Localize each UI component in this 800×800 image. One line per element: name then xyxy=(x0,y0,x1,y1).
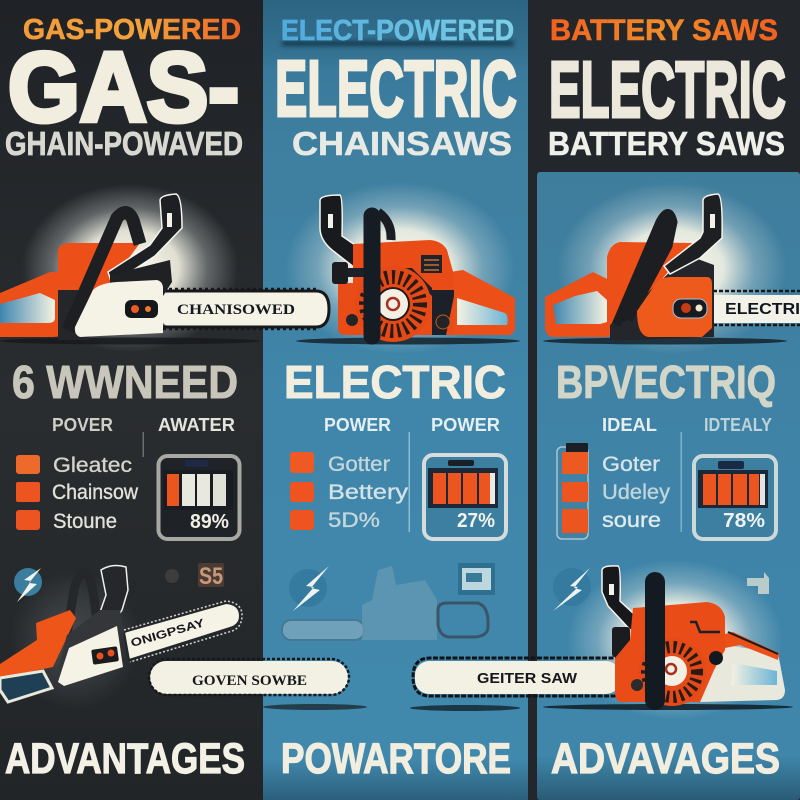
panel: battery column blue background xyxy=(537,172,800,800)
panel: gas-powered column background xyxy=(0,0,264,800)
indicator light right xyxy=(145,306,151,312)
heading block: gas column xyxy=(5,14,243,162)
cell 2 xyxy=(182,474,195,506)
divider xyxy=(142,432,144,457)
label: power: POVER xyxy=(52,415,113,435)
battery gauge xyxy=(424,455,506,539)
chainsaw: gas-powered xyxy=(0,194,329,344)
ghost bar xyxy=(282,620,364,640)
icon: lightning battery column xyxy=(553,568,591,611)
recoil starter xyxy=(638,638,706,706)
guide bar with chain xyxy=(413,658,620,696)
cell end xyxy=(490,473,495,504)
bullet 1 xyxy=(562,452,588,474)
divider xyxy=(680,432,682,532)
orange housing xyxy=(0,610,76,678)
battery cap xyxy=(448,460,474,466)
item 3: soure xyxy=(602,509,661,532)
front knob xyxy=(631,679,643,691)
handle window xyxy=(553,291,607,324)
item 3: Stoune xyxy=(53,510,117,533)
white cover xyxy=(75,280,163,337)
white cover xyxy=(58,626,123,686)
dark band xyxy=(348,268,432,296)
status indicator xyxy=(91,646,119,665)
label: ideally: IDTEALY xyxy=(704,415,772,435)
chainsaw: electric xyxy=(296,195,520,344)
heading block: electric column xyxy=(275,15,517,162)
front handle xyxy=(645,582,665,700)
ghost chainsaw: electric column xyxy=(282,566,488,640)
bullet 2 xyxy=(290,482,314,502)
item 1: Goter xyxy=(602,453,660,476)
black side block xyxy=(612,627,630,657)
engine housing xyxy=(110,260,172,296)
trigger slot xyxy=(609,584,614,595)
upper handle xyxy=(108,194,182,284)
bar label: GEITER SAW xyxy=(477,670,578,687)
grip dark stripe xyxy=(728,632,778,654)
battery cap xyxy=(185,460,208,467)
cell 3 xyxy=(463,473,477,504)
ground shadow xyxy=(543,704,793,710)
item 2: Udeley xyxy=(602,481,671,504)
label: power: POWER xyxy=(324,415,391,435)
upper handle xyxy=(320,195,355,268)
bottom label: powartore: POWARTORE xyxy=(281,735,511,783)
starter hub logo xyxy=(376,287,410,321)
bullet 2 xyxy=(562,482,588,502)
label: awater: AWATER xyxy=(158,415,235,435)
bullet 3 xyxy=(562,509,588,533)
rear knob xyxy=(436,315,450,329)
rear handle and orange body xyxy=(0,243,140,337)
bar label: GOVEN SOWBE xyxy=(192,673,307,689)
features: battery column xyxy=(557,415,776,539)
status indicator xyxy=(125,300,158,318)
cell 1 xyxy=(703,474,716,505)
dark body xyxy=(58,290,90,340)
bullet 3 xyxy=(290,510,314,530)
cell 1 xyxy=(433,473,446,504)
white rear handle xyxy=(700,645,785,702)
section heading: gas: 6 WWNEED xyxy=(12,356,238,408)
battery cap xyxy=(718,461,744,469)
glow behind lower chainsaw xyxy=(567,560,783,720)
vertical battery bullets xyxy=(557,443,588,539)
cell 2 xyxy=(718,474,731,505)
glow behind gas chainsaw xyxy=(22,184,238,352)
indicator light right xyxy=(108,650,114,656)
glow behind battery chainsaw xyxy=(557,182,787,354)
orange housing xyxy=(615,602,725,702)
ground shadow xyxy=(0,338,260,344)
cell end xyxy=(760,474,765,505)
chainsaw: battery xyxy=(543,194,800,344)
guide bar with chain xyxy=(708,291,800,325)
vent line detail xyxy=(690,622,720,632)
heading: electric large: ELECTRIC xyxy=(275,44,517,133)
ground shadow xyxy=(296,338,520,344)
chainsaw: lower right xyxy=(410,566,793,711)
bullet 1 xyxy=(290,452,314,473)
battery cap xyxy=(566,443,588,453)
dark housing xyxy=(57,610,124,688)
percentage: 78% xyxy=(723,510,765,532)
bar: gover sowbe xyxy=(149,659,367,710)
section heading: electric: ELECTRIC xyxy=(284,356,506,408)
chainsaw: tilted gas xyxy=(0,566,242,702)
arch behind front handle xyxy=(378,212,391,240)
label: power second: POWER xyxy=(431,415,500,435)
icon: badge battery column xyxy=(747,572,769,594)
indicator light left xyxy=(131,305,139,313)
trigger slot xyxy=(167,213,172,227)
bottom label: advantages: ADVANTAGES xyxy=(5,735,245,783)
chain xyxy=(149,659,349,695)
black side block xyxy=(332,262,348,284)
ghost handle xyxy=(438,603,488,637)
dark body xyxy=(610,258,714,340)
cell 4 xyxy=(479,473,490,504)
battery gauge xyxy=(158,456,240,539)
icon: lightning gas column xyxy=(14,568,42,602)
bullet 1 xyxy=(16,455,40,474)
rear handle xyxy=(433,270,515,335)
handle window xyxy=(0,293,55,323)
item 2: Bettery xyxy=(328,481,409,504)
recoil starter xyxy=(355,266,431,342)
shadow under elect-powered heading xyxy=(282,41,514,46)
features: electric column xyxy=(290,415,506,539)
status indicator xyxy=(673,299,707,318)
glow behind tilted chainsaw xyxy=(10,570,140,710)
bar label: ELECTRI xyxy=(725,301,800,318)
bar label: CHANISOWED xyxy=(177,302,295,318)
divider xyxy=(408,432,410,532)
left shadow xyxy=(410,705,520,711)
heading block: battery column xyxy=(548,14,786,162)
heading: battery saws orange: BATTERY SAWS xyxy=(550,14,778,47)
percentage: 89% xyxy=(190,511,229,533)
subheading: chain-powered: GHAIN-POWAVED xyxy=(5,125,243,162)
feature list xyxy=(16,454,139,533)
front handle xyxy=(616,214,673,325)
icon: badge electric column xyxy=(458,563,495,595)
guide bar with chain xyxy=(160,289,329,329)
front handle xyxy=(364,216,380,336)
upper handle xyxy=(98,566,128,628)
guide bar with chain xyxy=(124,601,242,662)
glow behind electric chainsaw xyxy=(285,182,515,354)
feature list xyxy=(602,453,671,532)
bar label: ONIGPSAY xyxy=(130,617,206,650)
trigger slot xyxy=(710,214,715,228)
orange rear grip xyxy=(725,632,779,660)
vent plate xyxy=(421,255,442,273)
indicator light right xyxy=(696,304,702,312)
heading: gas large: GAS- xyxy=(8,32,239,142)
upper handle xyxy=(664,194,722,274)
panel: electric column background xyxy=(263,0,529,800)
ground shadow xyxy=(263,704,367,710)
orange cover xyxy=(637,277,712,337)
cell 3 xyxy=(197,474,210,506)
handle window xyxy=(0,671,52,702)
item 3: 5D% xyxy=(328,509,380,532)
cell 2 xyxy=(448,473,461,504)
orange body and rear handle xyxy=(545,242,693,337)
cell 4 xyxy=(213,474,226,506)
features: gas column xyxy=(16,415,240,539)
item 2: Chainsow xyxy=(52,481,139,504)
heading: elect-powered: ELECT-POWERED xyxy=(281,15,514,47)
front handle xyxy=(66,573,96,640)
cell 4 xyxy=(749,474,759,505)
icon: power badge gas column xyxy=(165,563,224,590)
cell 3 xyxy=(733,474,747,505)
panel: battery column dark header background xyxy=(528,0,800,800)
dark strut xyxy=(432,290,454,335)
percentage: 27% xyxy=(457,510,495,532)
orange housing xyxy=(338,240,454,335)
item 1: Gleatec xyxy=(53,454,132,477)
handle window xyxy=(731,663,777,685)
item 1: Gotter xyxy=(328,453,390,476)
indicator light xyxy=(681,303,691,313)
hub logo xyxy=(657,656,687,686)
heading: gas-powered: GAS-POWERED xyxy=(23,14,241,46)
trigger slot xyxy=(328,214,333,228)
subheading: chainsaws: CHAINSAWS xyxy=(292,125,512,162)
battery gauge xyxy=(694,456,776,539)
upper handle xyxy=(602,566,635,635)
bullet 2 xyxy=(16,482,40,502)
handle window xyxy=(457,298,508,325)
rear knob xyxy=(709,651,723,665)
feature list xyxy=(290,452,409,532)
indicator light xyxy=(96,652,104,660)
cell 1 xyxy=(167,474,179,506)
icon: power badge gas column: S5 xyxy=(199,563,223,590)
front knob xyxy=(346,314,358,326)
subheading: battery saws white: BATTERY SAWS xyxy=(548,125,785,162)
icon: lightning electric column xyxy=(289,566,329,611)
label: ideal: IDEAL xyxy=(602,415,657,435)
front handle xyxy=(68,212,140,330)
ground shadow xyxy=(543,338,787,344)
bullet 3 xyxy=(16,510,40,530)
ghost body xyxy=(362,566,437,640)
